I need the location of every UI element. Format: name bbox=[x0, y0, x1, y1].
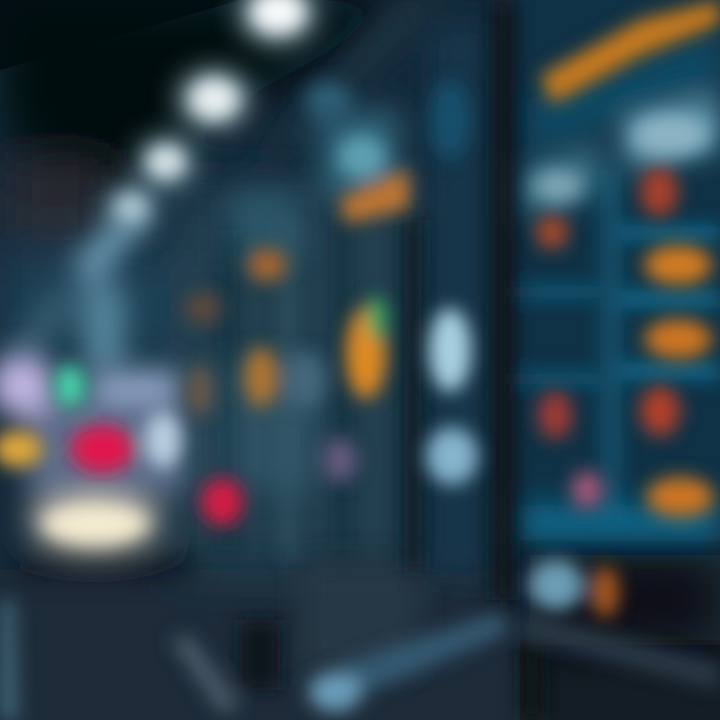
rack frames and columns bbox=[222, 0, 720, 600]
shelf products: right rack bbox=[528, 0, 720, 618]
shelf products: centre aisle bbox=[185, 80, 478, 485]
lights and ceiling rail bbox=[10, 0, 350, 370]
floor details bbox=[0, 600, 720, 720]
vehicle and coloured lights at left bbox=[0, 353, 243, 571]
light halos bbox=[108, 0, 316, 229]
ceiling lights bbox=[116, 0, 350, 221]
shelving structure bbox=[210, 0, 720, 670]
